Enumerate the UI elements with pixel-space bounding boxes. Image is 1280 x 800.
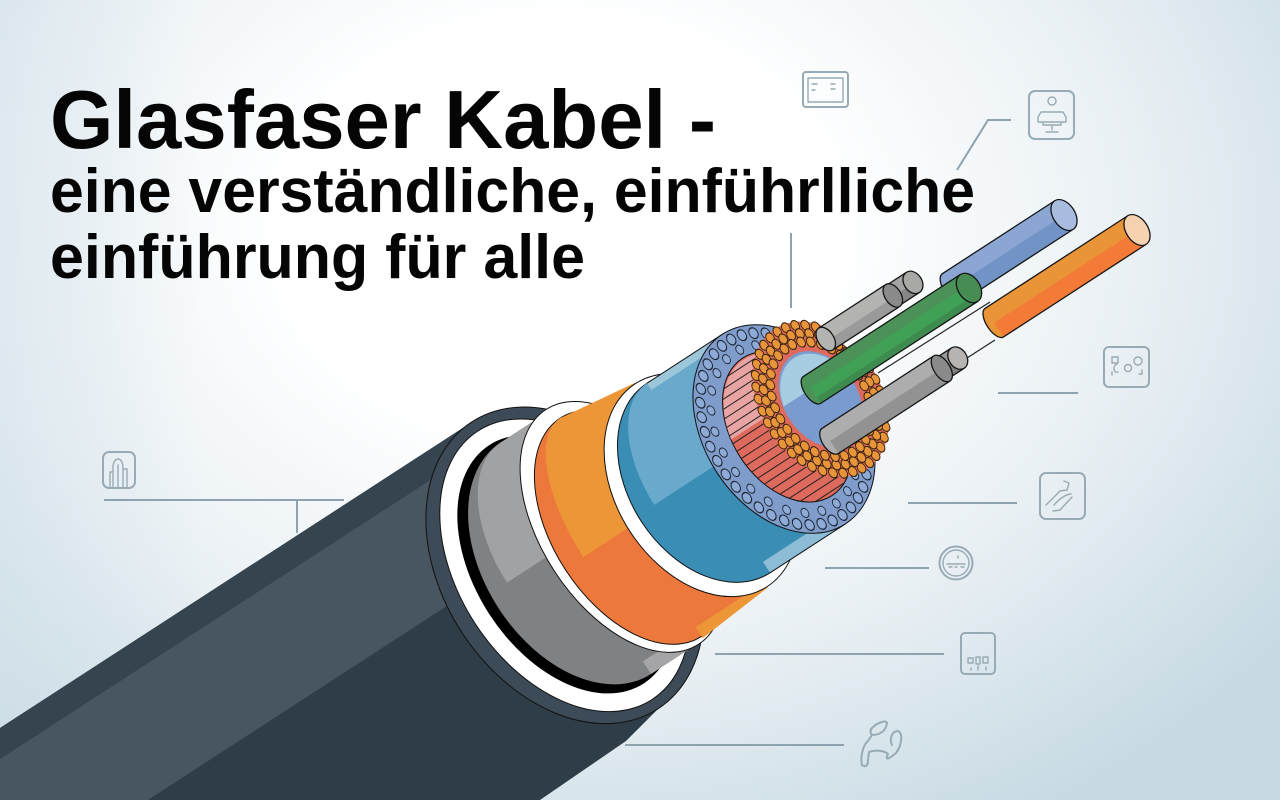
icon: circle connector	[940, 546, 972, 580]
grey shield layer	[423, 392, 728, 724]
white collar	[478, 365, 766, 688]
heading line 2: eine verständliche, einführlliche	[50, 157, 975, 226]
inner blue core	[761, 335, 880, 463]
heading line 1: Glasfaser Kabel -	[50, 73, 716, 166]
cable layers	[425, 324, 876, 724]
icon: printer	[1029, 91, 1074, 139]
jacket rings	[369, 355, 761, 776]
red fibre bundle	[722, 352, 848, 502]
title	[50, 73, 975, 292]
blue layer	[580, 334, 846, 616]
icon: building	[103, 452, 135, 488]
icon: device	[961, 633, 995, 674]
icon: card	[803, 72, 848, 107]
cable illustration	[0, 195, 1155, 800]
outer jacket body	[0, 422, 658, 800]
fibre: grey lower	[815, 341, 973, 458]
heading line 3: einführung für alle	[50, 223, 585, 292]
icon: hand	[861, 722, 901, 766]
icon: tool	[1040, 473, 1085, 519]
orange layer	[495, 374, 771, 680]
front face: strand ring	[655, 291, 913, 567]
thin fibre lines	[878, 302, 995, 373]
fibre: green	[797, 269, 987, 408]
fibre: blue	[936, 195, 1082, 307]
white collar 2	[564, 337, 838, 633]
orange aramid strands	[750, 320, 890, 479]
fibre: grey upper	[812, 267, 928, 354]
icon: panel	[1104, 347, 1149, 387]
fibre: orange	[978, 210, 1155, 341]
leader lines	[104, 120, 1078, 745]
